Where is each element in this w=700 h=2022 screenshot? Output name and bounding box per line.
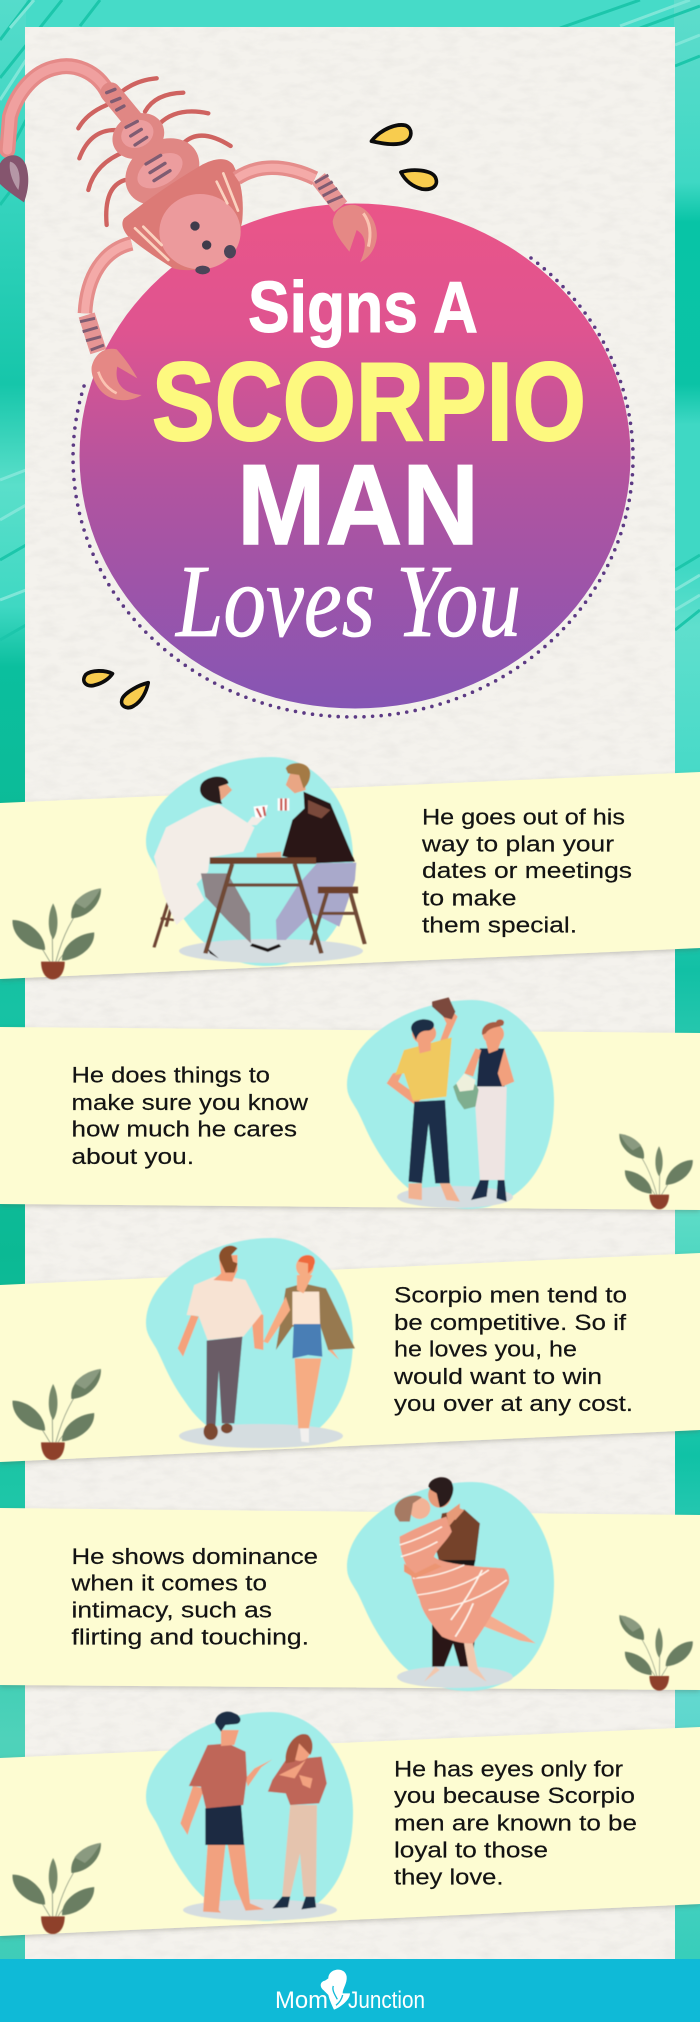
panel: sign 4 — [0, 1477, 700, 1691]
logo: MomJunction: Mom — [275, 1987, 328, 2014]
text: sign 3: would want to win — [393, 1364, 602, 1389]
text: sign 3: you over at any cost. — [394, 1391, 633, 1416]
illustration: embracing couple — [347, 1477, 693, 1691]
text: sign 1: way to plan your — [421, 832, 615, 856]
text: sign 4: intimacy, such as — [72, 1598, 272, 1622]
text: sign 2 — [72, 1062, 309, 1169]
text: sign 1: them special. — [422, 912, 577, 938]
logo: MomJunction: Junction — [348, 1987, 425, 2014]
illustration: couple talking — [12, 1712, 353, 1934]
panel: sign 2 — [0, 997, 700, 1210]
text: sign 3: he loves you, he — [394, 1336, 577, 1362]
illustration: couple at table — [12, 757, 365, 979]
icon: scorpion — [0, 66, 377, 400]
title: SCORPIO — [152, 340, 586, 464]
title disc with dotted outline — [73, 204, 633, 717]
panel: sign 3 — [0, 1238, 700, 1462]
title: MAN — [237, 442, 479, 569]
logo: MomJunction — [275, 1970, 425, 2014]
text: sign 5 — [394, 1756, 637, 1890]
text: sign 4: when it comes to — [70, 1570, 267, 1596]
illustration: couple walking hand in hand — [12, 1238, 355, 1460]
title — [152, 268, 586, 659]
text: sign 1: dates or meetings — [422, 858, 632, 883]
text: sign 3 — [393, 1282, 633, 1416]
text: sign 4 — [70, 1544, 318, 1650]
text: sign 4: He shows dominance — [72, 1544, 318, 1569]
text: sign 3: Scorpio men tend to — [394, 1282, 627, 1308]
text: sign 5: they love. — [394, 1864, 504, 1890]
title: Loves You — [174, 544, 521, 659]
text: sign 1: He goes out of his — [422, 804, 625, 830]
panel: sign 5 — [0, 1712, 700, 1936]
text: sign 5: loyal to those — [394, 1838, 548, 1862]
text: sign 2: make sure you know — [72, 1090, 309, 1115]
footer band — [0, 1959, 700, 2022]
text: sign 1 — [421, 804, 632, 938]
text: sign 5: men are known to be — [394, 1810, 637, 1836]
text: sign 3: be competitive. So if — [394, 1310, 627, 1335]
text: sign 1: to make — [422, 886, 516, 910]
text: sign 5: you because Scorpio — [394, 1783, 635, 1808]
icons: yellow droplets — [84, 125, 436, 708]
panel: sign 1 — [0, 757, 700, 979]
illustration: couple with wallet and bag — [347, 997, 693, 1209]
text: sign 2: how much he cares — [72, 1116, 297, 1142]
text: sign 2: about you. — [72, 1144, 194, 1169]
title: Signs A — [248, 268, 478, 348]
text: sign 5: He has eyes only for — [394, 1756, 624, 1782]
text: sign 2: He does things to — [72, 1062, 270, 1088]
text: sign 4: flirting and touching. — [72, 1624, 309, 1650]
